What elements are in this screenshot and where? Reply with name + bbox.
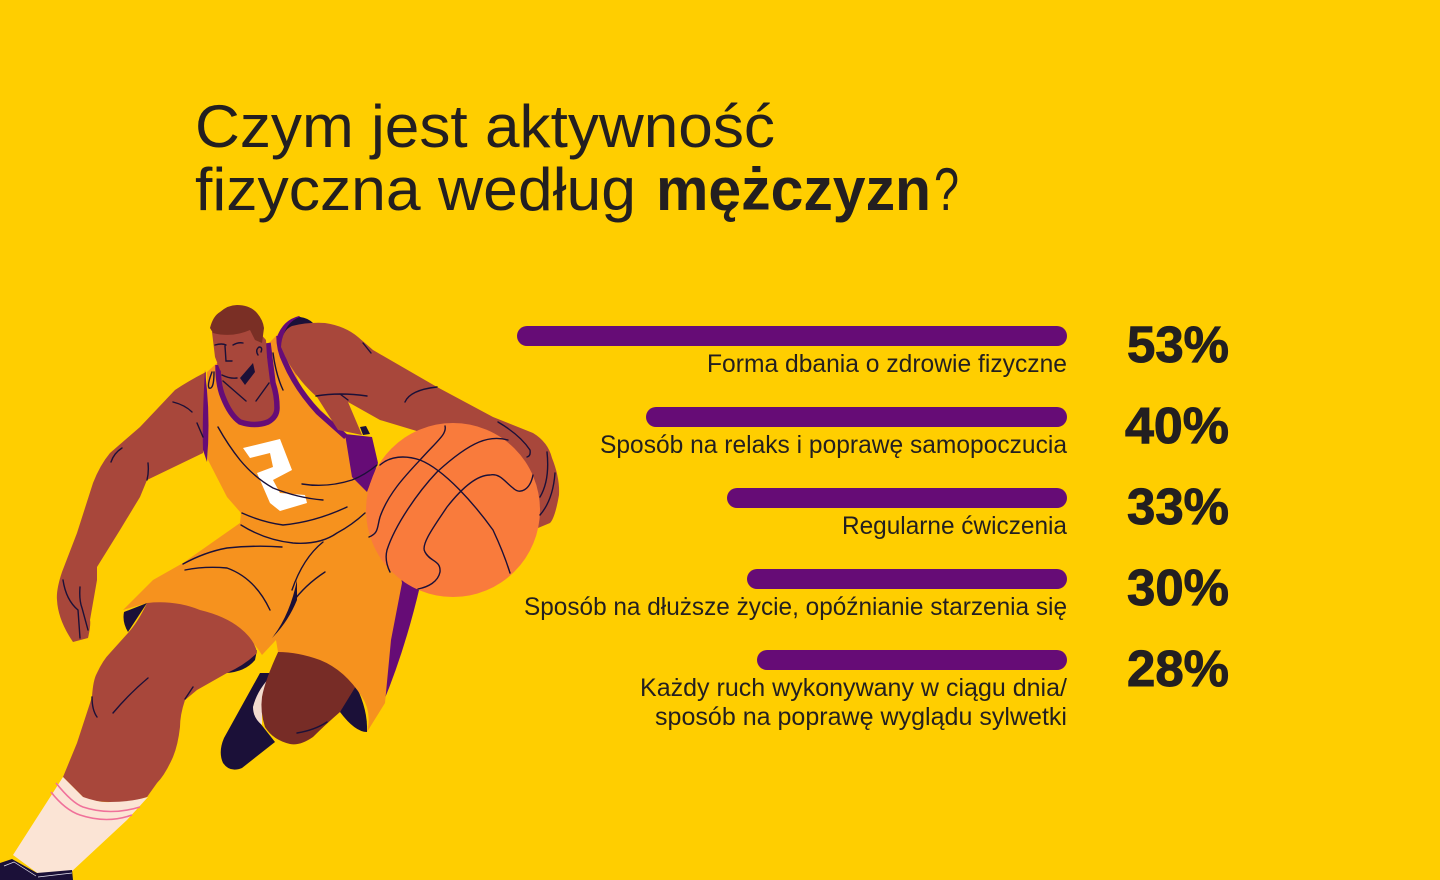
jersey and shorts — [123, 332, 402, 732]
hair — [210, 305, 264, 343]
row: 33%: Regularne ćwiczenia — [842, 512, 1067, 540]
row: 30% — [524, 559, 1229, 621]
bar chart — [517, 316, 1229, 731]
shorts inner shadow — [340, 686, 367, 732]
armhole trim — [277, 316, 378, 492]
row: 28%: Każdy ruch wykonywany w ciągu dnia/ — [640, 674, 1067, 702]
back foot sock — [253, 675, 272, 725]
back leg — [261, 650, 358, 744]
row: 40%: 40% — [1125, 397, 1229, 454]
armpit small shadow — [360, 426, 370, 435]
row: 30%: 30% — [1127, 559, 1229, 616]
front leg — [63, 602, 257, 802]
neck shadow — [240, 363, 255, 385]
white jersey number — [243, 439, 307, 511]
row: 53%: 53% — [1127, 316, 1229, 373]
sock — [13, 777, 148, 875]
right arm and hand — [281, 323, 559, 528]
head and neck — [212, 322, 268, 392]
contour lines — [63, 343, 555, 733]
row: 53% — [517, 316, 1229, 378]
basketball — [366, 423, 540, 597]
armpit shadow — [282, 317, 313, 342]
title: Czym jest aktywność — [195, 93, 775, 160]
row: 33%: 33% — [1127, 478, 1229, 535]
title: ? — [934, 156, 959, 223]
row: 53%: Forma dbania o zdrowie fizyczne — [707, 350, 1067, 378]
row: 28%: sposób na poprawę wyglądu sylwetki — [655, 703, 1067, 731]
left arm and hand — [57, 372, 206, 642]
front shoe — [0, 859, 73, 880]
illustration: basketball player — [0, 305, 559, 880]
purple side stripe — [383, 578, 420, 703]
row: 28%: 28% — [1127, 640, 1229, 697]
row: 40% — [600, 397, 1229, 459]
collar — [218, 343, 277, 424]
title — [195, 93, 959, 223]
title: fizyczna według — [195, 156, 636, 223]
crotch shadow — [272, 580, 297, 638]
title: mężczyzn — [656, 156, 931, 223]
chest — [217, 345, 278, 425]
back foot shoe — [221, 673, 275, 770]
row: 40%: Sposób na relaks i poprawę samopoczucia — [600, 431, 1067, 459]
sock stripes — [51, 783, 140, 820]
purple left trim — [203, 370, 208, 462]
front leg shadows — [124, 603, 257, 673]
row: 28% — [640, 640, 1229, 731]
row: 30%: Sposób na dłuższe życie, opóźnianie starzenia się — [524, 593, 1067, 621]
row: 33% — [727, 478, 1229, 540]
left strap detail — [208, 372, 214, 388]
ear — [254, 343, 265, 358]
